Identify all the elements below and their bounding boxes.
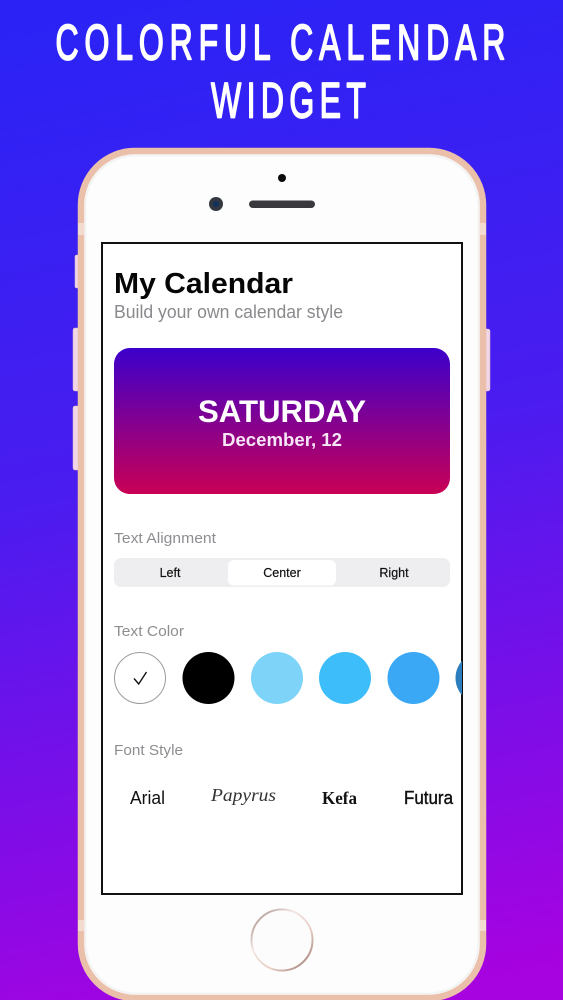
- widget preview card: [114, 348, 450, 494]
- label: font style: Font Style: [114, 742, 183, 759]
- icon: check mark: [134, 672, 146, 684]
- segmented control: Right: [379, 566, 409, 580]
- color swatches: [114, 652, 462, 704]
- weekday: SATURDAY: [198, 393, 366, 429]
- font options: Futura: [404, 788, 454, 808]
- segmented control: Left: [160, 566, 181, 580]
- phone mockup: [73, 151, 490, 998]
- font options: Kefa: [322, 788, 357, 808]
- segmented control: Center: [263, 566, 301, 580]
- phone body: [81, 151, 483, 998]
- heading: My Calendar: [114, 268, 293, 300]
- app screen: [101, 242, 463, 895]
- home button: [252, 910, 312, 970]
- side buttons: [73, 255, 490, 470]
- sensor dot: [278, 174, 286, 182]
- title: [56, 14, 505, 128]
- title: WIDGET: [211, 72, 366, 128]
- font options: [130, 785, 454, 808]
- inner bezel edge: [86, 156, 478, 994]
- front camera: [209, 197, 223, 211]
- speaker: [249, 200, 315, 208]
- label: text alignment: Text Alignment: [114, 530, 217, 547]
- antenna bands: [78, 223, 486, 931]
- date: December, 12: [222, 430, 342, 450]
- subtitle: Build your own calendar style: [114, 302, 343, 322]
- segmented control: [114, 558, 450, 587]
- font options: Arial: [130, 788, 165, 808]
- label: text color: Text Color: [114, 623, 184, 640]
- title: COLORFUL CALENDAR: [56, 14, 505, 70]
- font options: Papyrus: [210, 785, 276, 805]
